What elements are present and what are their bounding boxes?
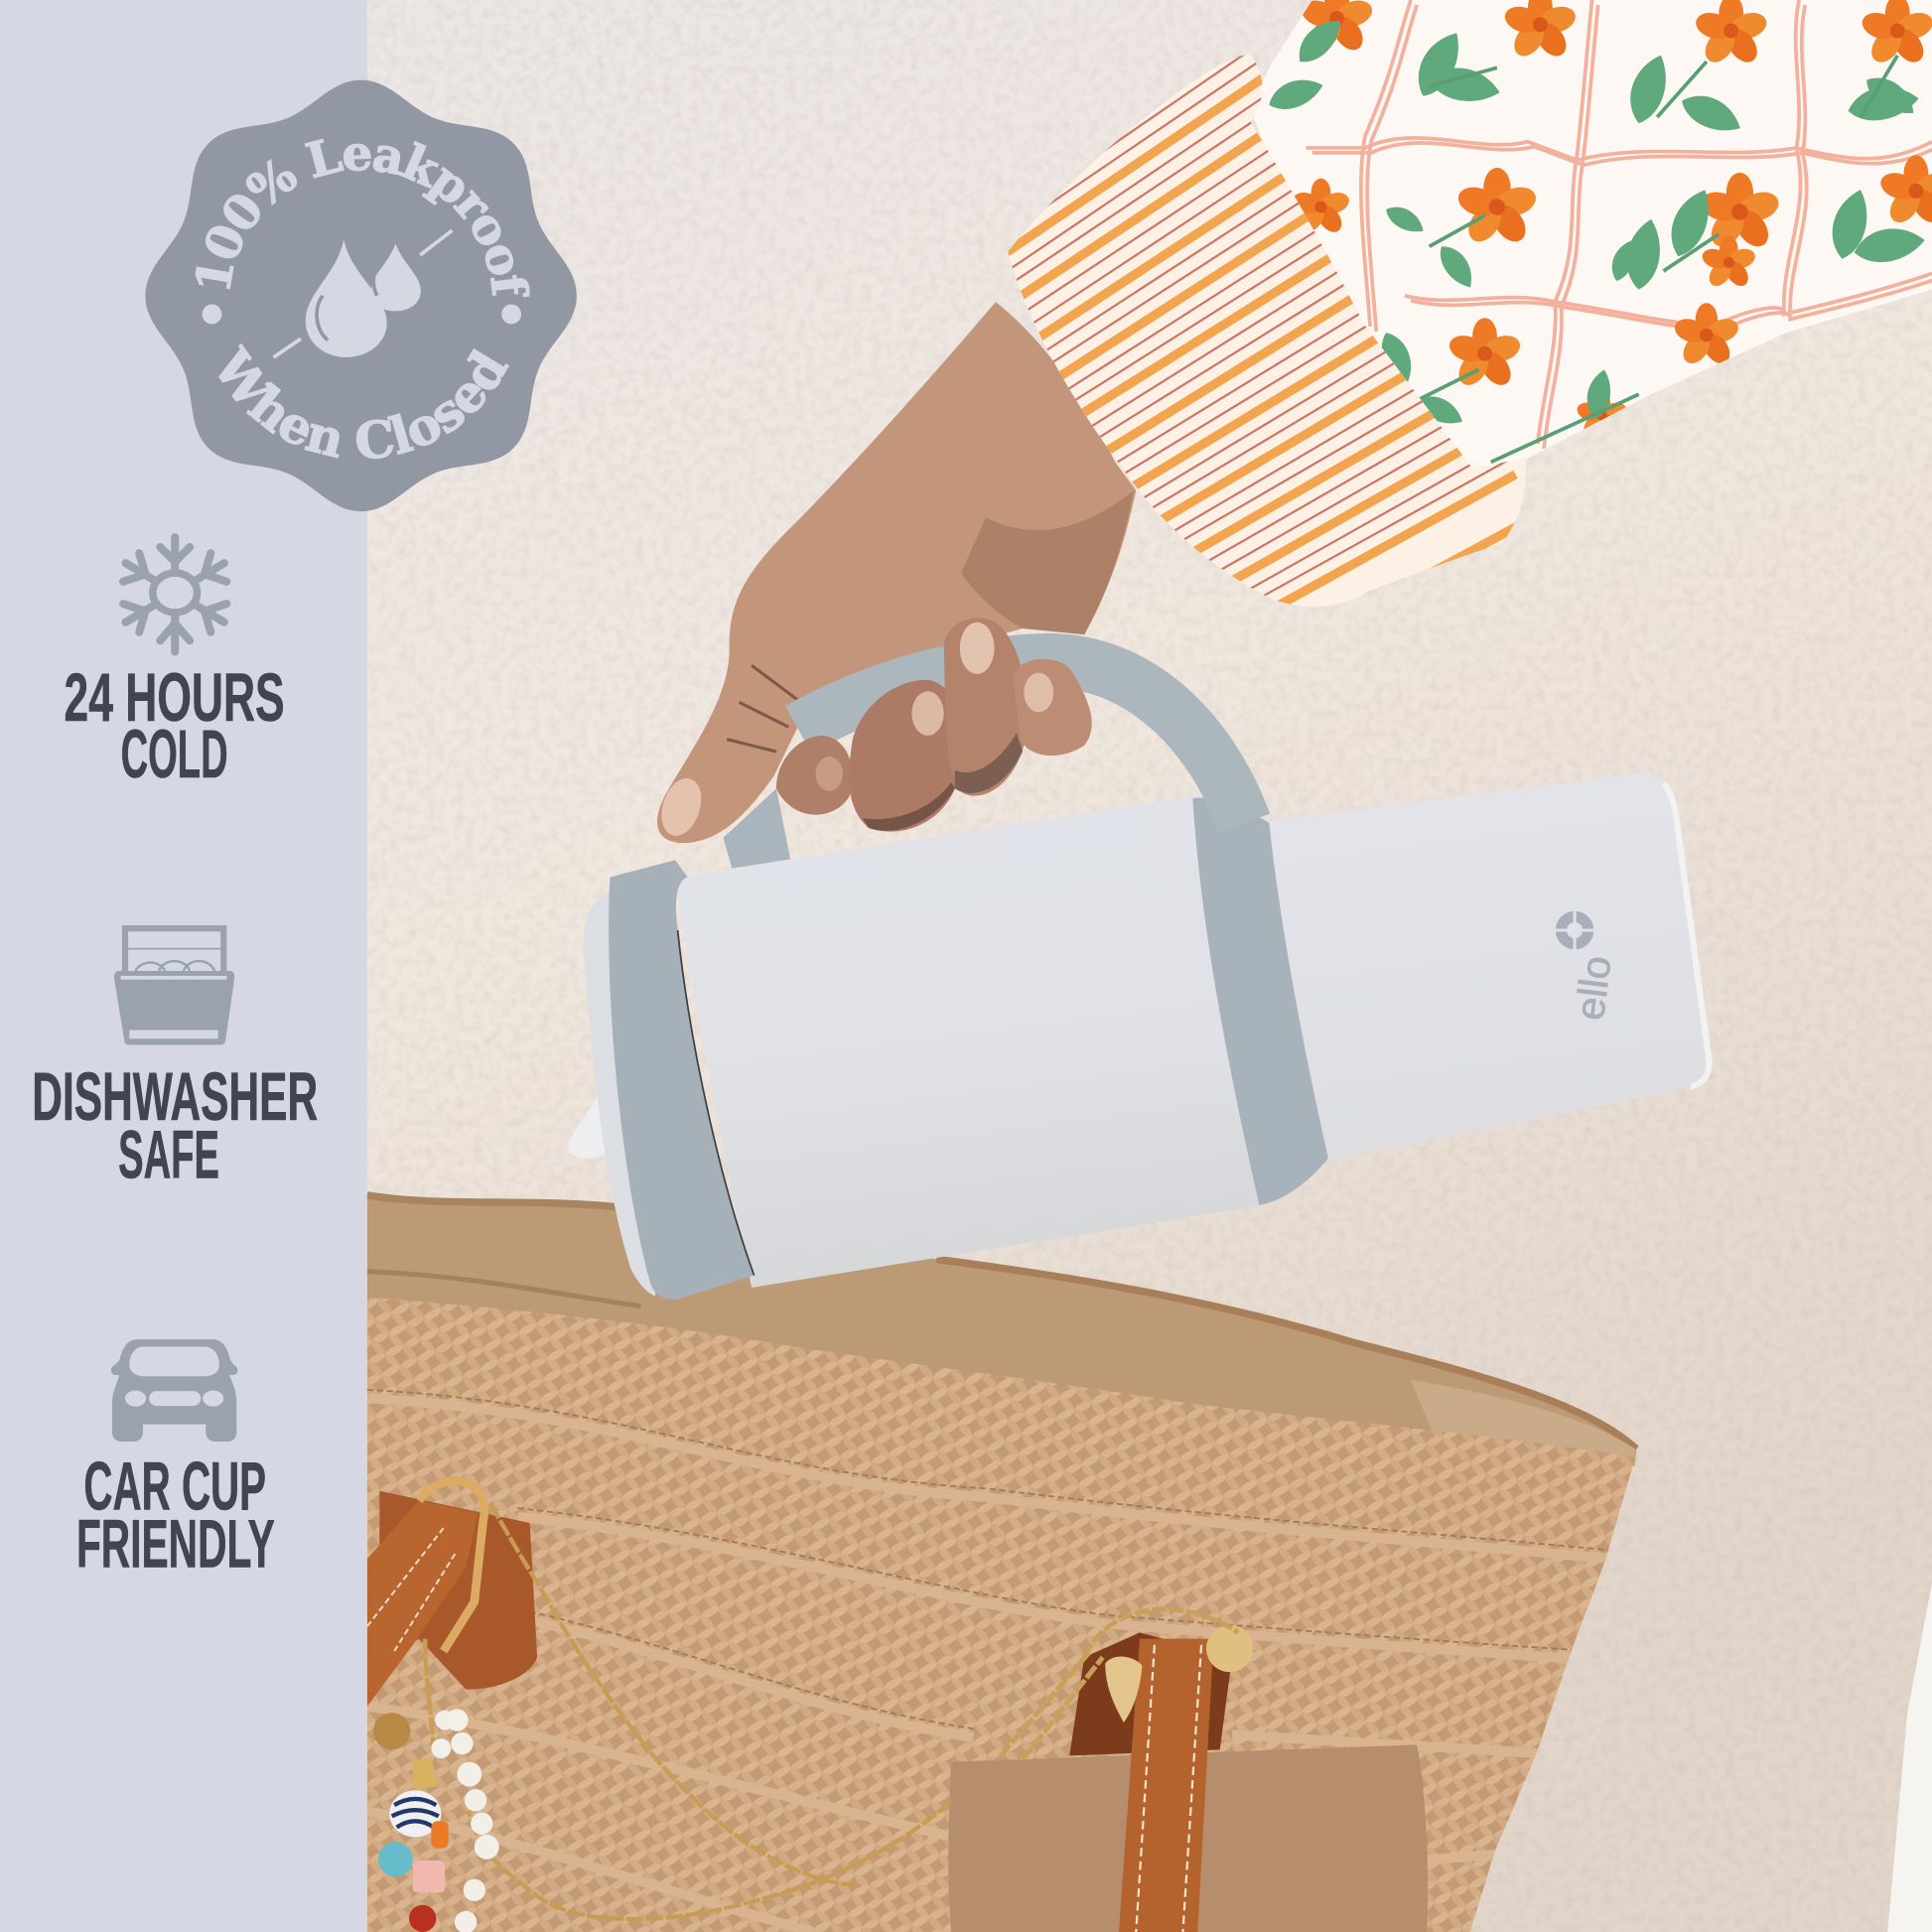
striped cuff bbox=[1008, 54, 1526, 607]
tumbler upper section bbox=[1257, 773, 1710, 1165]
gold chains bbox=[425, 1503, 951, 1919]
label: 24 hours cold bbox=[65, 660, 285, 792]
fingers gripping handle bbox=[776, 618, 1092, 832]
label: 24 hours cold: COLD bbox=[121, 717, 228, 792]
pouch and right strap bbox=[948, 1609, 1428, 1932]
tumbler lid bbox=[584, 860, 755, 1300]
tumbler grip band bbox=[1192, 798, 1328, 1205]
icon: snowflake bbox=[123, 537, 226, 652]
icon: car bbox=[111, 1339, 237, 1442]
label: car cup friendly: FRIENDLY bbox=[76, 1507, 275, 1583]
bag lining bbox=[367, 1195, 1636, 1466]
pearl and bead charm strand bbox=[373, 1709, 499, 1932]
label: dishwasher safe bbox=[32, 1059, 318, 1192]
logo: ello: ello bbox=[1567, 953, 1619, 1023]
label: 24 hours cold: 24 HOURS bbox=[65, 660, 285, 736]
label: car cup friendly: CAR CUP bbox=[83, 1449, 266, 1524]
feature panel background bbox=[0, 0, 367, 1932]
tumbler handle bbox=[798, 660, 1244, 823]
woven bag bbox=[367, 1298, 1635, 1932]
badge: 100% leakproof when closed: 100% Leakproof bbox=[195, 139, 530, 298]
hand and palm bbox=[654, 302, 1136, 843]
label: dishwasher safe: DISHWASHER bbox=[32, 1059, 318, 1135]
tumbler spout bbox=[568, 1094, 617, 1159]
icon: dishwasher bbox=[114, 925, 234, 1044]
badge: 100% leakproof when closed: When Closed bbox=[218, 344, 509, 459]
badge: 100% leakproof when closed bbox=[145, 79, 577, 511]
tumbler main body bbox=[675, 794, 1263, 1288]
jacket sleeve bbox=[1251, 0, 1932, 471]
icon: water drops bbox=[274, 230, 452, 357]
logo: ello bbox=[1555, 910, 1619, 1023]
handle leg bbox=[724, 788, 791, 885]
label: car cup friendly bbox=[76, 1449, 275, 1583]
label: dishwasher safe: SAFE bbox=[118, 1117, 219, 1192]
left leather strap and tab bbox=[367, 1481, 537, 1707]
